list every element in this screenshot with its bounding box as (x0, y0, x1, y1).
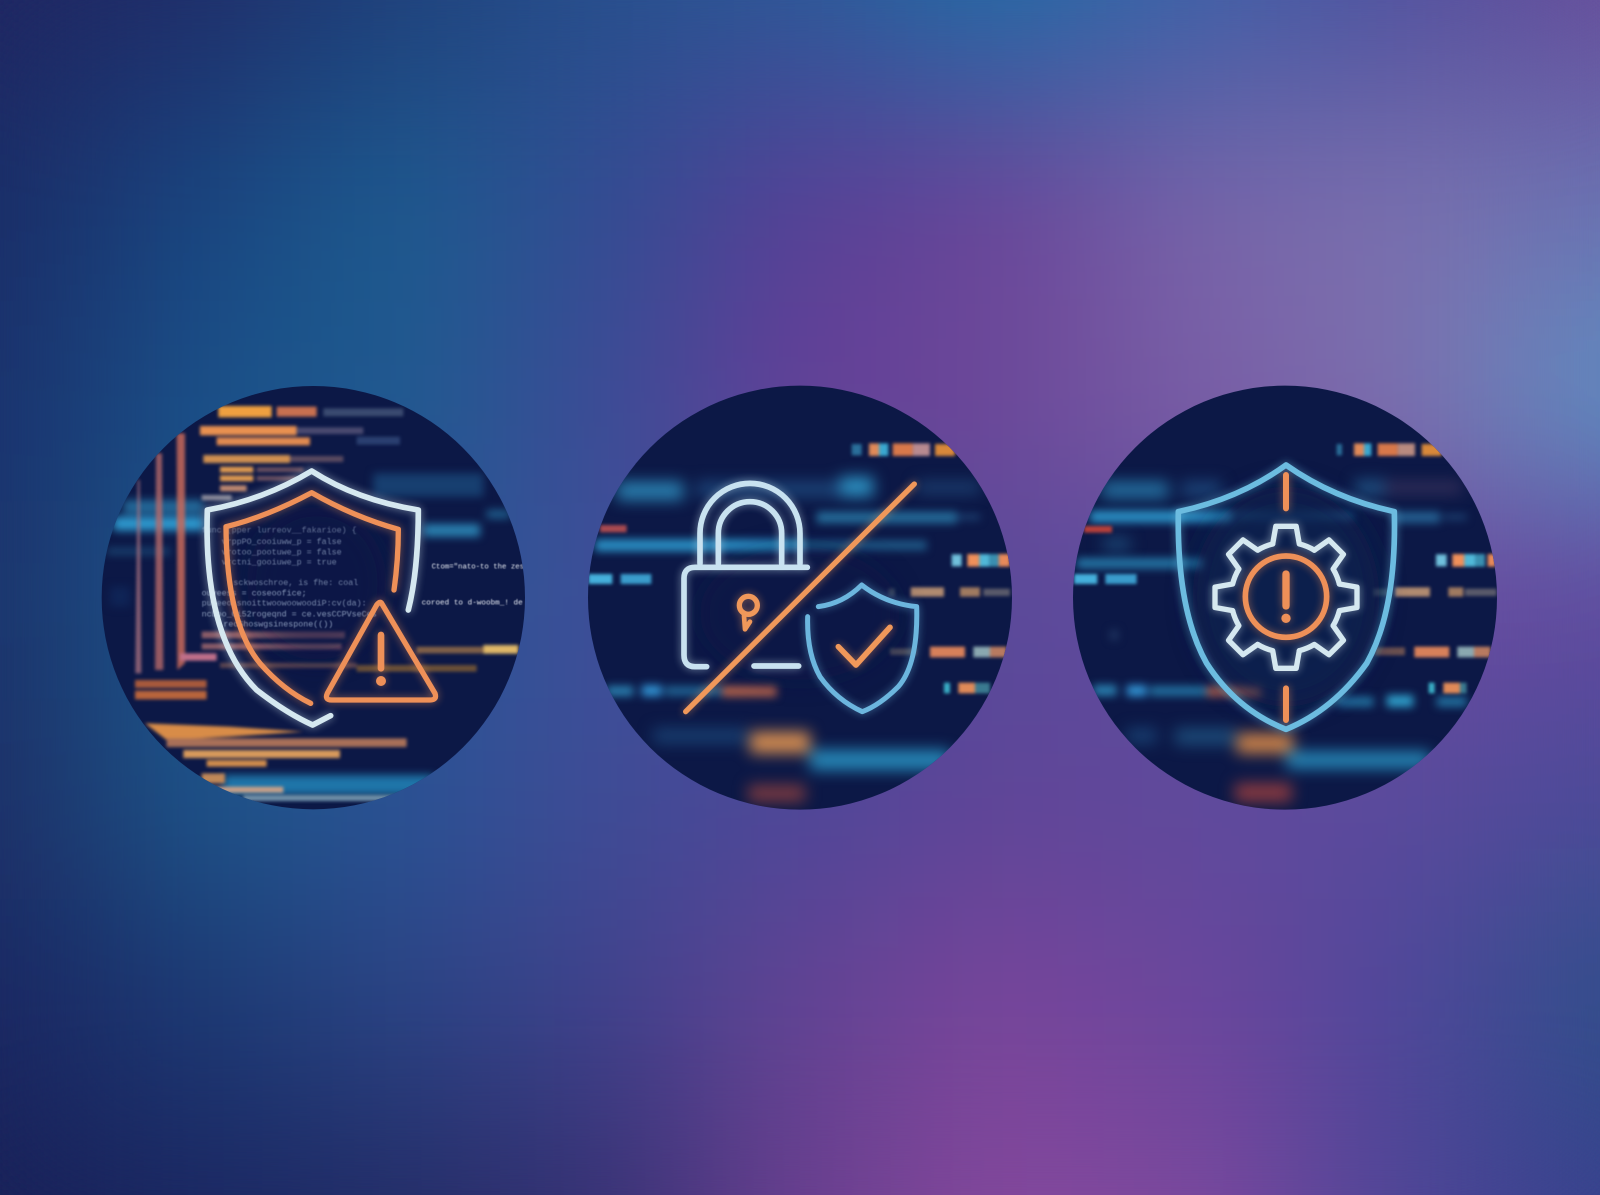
shield outer outline (207, 471, 418, 725)
data-stream backdrop (588, 443, 1010, 802)
code text: ouveess = coseoofice; (202, 589, 307, 599)
code text (202, 526, 524, 630)
code text: sckwoschroe, is fhe: coal (233, 578, 358, 588)
code text: puveeossnoittwoowoowoodiP:cv(da): (202, 598, 367, 608)
dark halo behind shield (1193, 487, 1379, 707)
code text: vrppPO_cooiuww_p = false (222, 537, 342, 547)
slash (686, 484, 914, 712)
code text: Ctom="nato-to the zes (432, 563, 524, 571)
icon: crossed padlock and shield with check (684, 483, 917, 712)
alert ring and exclamation (1245, 556, 1327, 637)
data-stream backdrop (1074, 443, 1497, 802)
padlock (684, 483, 807, 667)
code text: vrctni_gooiuwe_p = true (222, 558, 337, 568)
shield outline (1178, 465, 1394, 729)
code text: coroed to d-woobm_! de (422, 599, 523, 607)
code text: reoGhoswgsinespone(()) (223, 620, 333, 630)
code text: vrotoo_pootuwe_p = false (222, 548, 342, 558)
orange ticks (1277, 475, 1295, 720)
warning triangle (326, 602, 436, 700)
small shield (808, 585, 917, 712)
panel: padlock struck through with shield check (588, 386, 1012, 810)
code text: ncboo_Gi52rogeqnd = ce.vesCCPVseCes (202, 610, 377, 620)
panel: warning shield over code (102, 386, 525, 810)
shield inner outline (226, 493, 398, 703)
check mark (838, 627, 890, 665)
gear (1215, 526, 1357, 668)
icon: shield with warning triangle (207, 471, 436, 725)
dark halo behind lock and shield (700, 547, 900, 680)
dark halo behind shield (248, 630, 346, 668)
code backdrop: blurred highlighted lines (107, 406, 524, 801)
code text: func (pper lurreov__fakarioe) { (202, 526, 357, 536)
keyhole (739, 596, 757, 629)
icon: shield, gear and exclamation (1178, 465, 1394, 729)
panel: shield with gear and alert (1073, 386, 1497, 810)
